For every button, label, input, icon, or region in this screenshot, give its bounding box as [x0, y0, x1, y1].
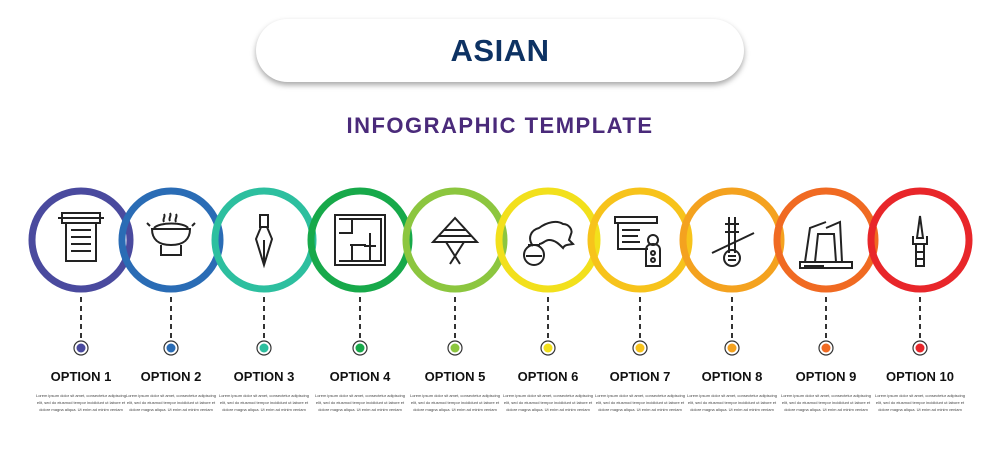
- option 2: [122, 191, 220, 412]
- option 7: dolore magna aliqua. Ut enim ad minim veniam: [598, 407, 682, 412]
- title pill: [256, 19, 744, 82]
- option 6: OPTION 6: [518, 369, 578, 384]
- option 6: Lorem ipsum dolor sit amet, consectetur adipiscing: [503, 393, 593, 398]
- option 4: elit, sed do eiusmod tempor incididunt ut labore et: [316, 400, 405, 405]
- option 3: OPTION 3: [234, 369, 294, 384]
- option 3: [215, 191, 313, 412]
- option 3: elit, sed do eiusmod tempor incididunt ut labore et: [220, 400, 309, 405]
- option 9: OPTION 9: [796, 369, 856, 384]
- option 5: elit, sed do eiusmod tempor incididunt ut labore et: [411, 400, 500, 405]
- option 5: [406, 191, 504, 412]
- option 7: OPTION 7: [610, 369, 670, 384]
- option 3: dolore magna aliqua. Ut enim ad minim veniam: [222, 407, 306, 412]
- option 2: OPTION 2: [141, 369, 201, 384]
- option 1: dolore magna aliqua. Ut enim ad minim veniam: [39, 407, 123, 412]
- option 5: OPTION 5: [425, 369, 485, 384]
- option 1: elit, sed do eiusmod tempor incididunt ut labore et: [37, 400, 126, 405]
- option 4: Lorem ipsum dolor sit amet, consectetur adipiscing: [315, 393, 405, 398]
- option 7: elit, sed do eiusmod tempor incididunt ut labore et: [596, 400, 685, 405]
- option 2: elit, sed do eiusmod tempor incididunt ut labore et: [127, 400, 216, 405]
- option 1: OPTION 1: [51, 369, 111, 384]
- option 10: elit, sed do eiusmod tempor incididunt ut labore et: [876, 400, 965, 405]
- subtitle: INFOGRAPHIC TEMPLATE: [346, 113, 654, 138]
- option 4: OPTION 4: [330, 369, 391, 384]
- option 3: Lorem ipsum dolor sit amet, consectetur adipiscing: [219, 393, 309, 398]
- option 10: OPTION 10: [886, 369, 954, 384]
- option 6: dolore magna aliqua. Ut enim ad minim veniam: [506, 407, 590, 412]
- option 7: Lorem ipsum dolor sit amet, consectetur adipiscing: [595, 393, 685, 398]
- option 2: dolore magna aliqua. Ut enim ad minim veniam: [129, 407, 213, 412]
- option 6: [499, 191, 597, 412]
- option 8: OPTION 8: [702, 369, 762, 384]
- option 7: [591, 191, 689, 412]
- option 8: dolore magna aliqua. Ut enim ad minim veniam: [690, 407, 774, 412]
- option 5: dolore magna aliqua. Ut enim ad minim veniam: [413, 407, 497, 412]
- option 10: [871, 191, 969, 412]
- option 2: Lorem ipsum dolor sit amet, consectetur adipiscing: [126, 393, 216, 398]
- option 8: [683, 191, 781, 412]
- option 1: [32, 191, 130, 412]
- option 8: elit, sed do eiusmod tempor incididunt ut labore et: [688, 400, 777, 405]
- option 9: [777, 191, 875, 412]
- option 9: dolore magna aliqua. Ut enim ad minim veniam: [784, 407, 868, 412]
- option 8: Lorem ipsum dolor sit amet, consectetur adipiscing: [687, 393, 777, 398]
- option 6: elit, sed do eiusmod tempor incididunt ut labore et: [504, 400, 593, 405]
- option 9: Lorem ipsum dolor sit amet, consectetur adipiscing: [781, 393, 871, 398]
- option 1: Lorem ipsum dolor sit amet, consectetur adipiscing: [36, 393, 126, 398]
- option 4: [311, 191, 409, 412]
- option 9: elit, sed do eiusmod tempor incididunt ut labore et: [782, 400, 871, 405]
- option 10: dolore magna aliqua. Ut enim ad minim veniam: [878, 407, 962, 412]
- option 4: dolore magna aliqua. Ut enim ad minim veniam: [318, 407, 402, 412]
- option 5: Lorem ipsum dolor sit amet, consectetur adipiscing: [410, 393, 500, 398]
- option 10: Lorem ipsum dolor sit amet, consectetur adipiscing: [875, 393, 965, 398]
- title: ASIAN: [451, 33, 549, 68]
